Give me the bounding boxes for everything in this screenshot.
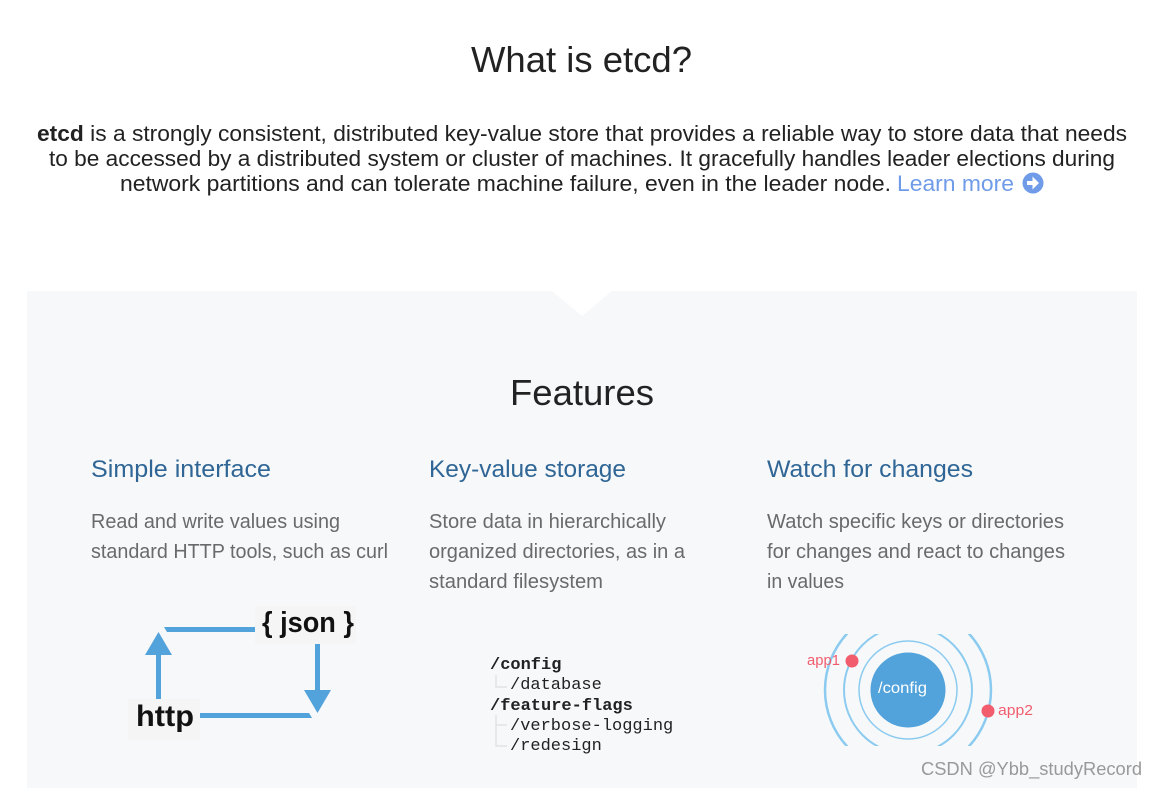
diagram: http json cycle xyxy=(128,606,356,740)
diagram: watch rings: app2 xyxy=(998,702,1033,719)
column: watch for changes: in values xyxy=(767,571,844,593)
column: key-value storage: Key-value storage xyxy=(429,456,626,483)
column: watch for changes: Watch for changes xyxy=(767,456,973,483)
intro paragraph xyxy=(37,121,1127,196)
column: watch for changes: for changes and react to changes xyxy=(767,541,1065,563)
icon: learn more arrow xyxy=(1022,172,1044,194)
column: key-value storage xyxy=(429,456,686,593)
column: watch for changes xyxy=(767,456,1065,593)
diagram: watch rings xyxy=(808,634,1032,746)
intro paragraph: etcd is a strongly consistent, distributed key-value store that provides a reliable way to store data that needs xyxy=(37,121,1127,146)
title: What is etcd? xyxy=(471,39,692,80)
diagram: http json cycle: { json } xyxy=(262,607,354,639)
diagram: watch rings: app1 xyxy=(807,652,840,669)
heading: features: Features xyxy=(510,372,654,413)
column: key-value storage: Store data in hierarchically xyxy=(429,511,666,533)
panel: features xyxy=(92,380,1064,754)
column: simple interface: standard HTTP tools, such as curl xyxy=(91,541,388,563)
diagram: directory tree: /database xyxy=(510,676,602,695)
intro paragraph: to be accessed by a distributed system or cluster of machines. It gracefully handles leader elections during xyxy=(49,146,1115,171)
diagram: http json cycle: http xyxy=(136,700,194,733)
column: simple interface: Read and write values using xyxy=(91,511,340,533)
column: simple interface: Simple interface xyxy=(91,456,271,483)
intro paragraph: network partitions and can tolerate machine failure, even in the leader node. xyxy=(120,171,891,196)
diagram: directory tree xyxy=(490,656,673,756)
intro paragraph: Learn more xyxy=(897,171,1014,196)
diagram: directory tree: /redesign xyxy=(510,737,602,756)
column: key-value storage: organized directories, as in a xyxy=(429,541,686,563)
diagram: watch rings: /config xyxy=(878,680,927,697)
column: simple interface xyxy=(91,456,388,563)
column: watch for changes: Watch specific keys or directories xyxy=(767,511,1064,533)
diagram: directory tree: /verbose-logging xyxy=(510,717,673,736)
diagram: directory tree: /feature-flags xyxy=(490,697,633,716)
column: key-value storage: standard filesystem xyxy=(429,571,603,593)
diagram: directory tree: /config xyxy=(490,656,561,675)
watermark: CSDN @Ybb_studyRecord xyxy=(921,758,1142,780)
